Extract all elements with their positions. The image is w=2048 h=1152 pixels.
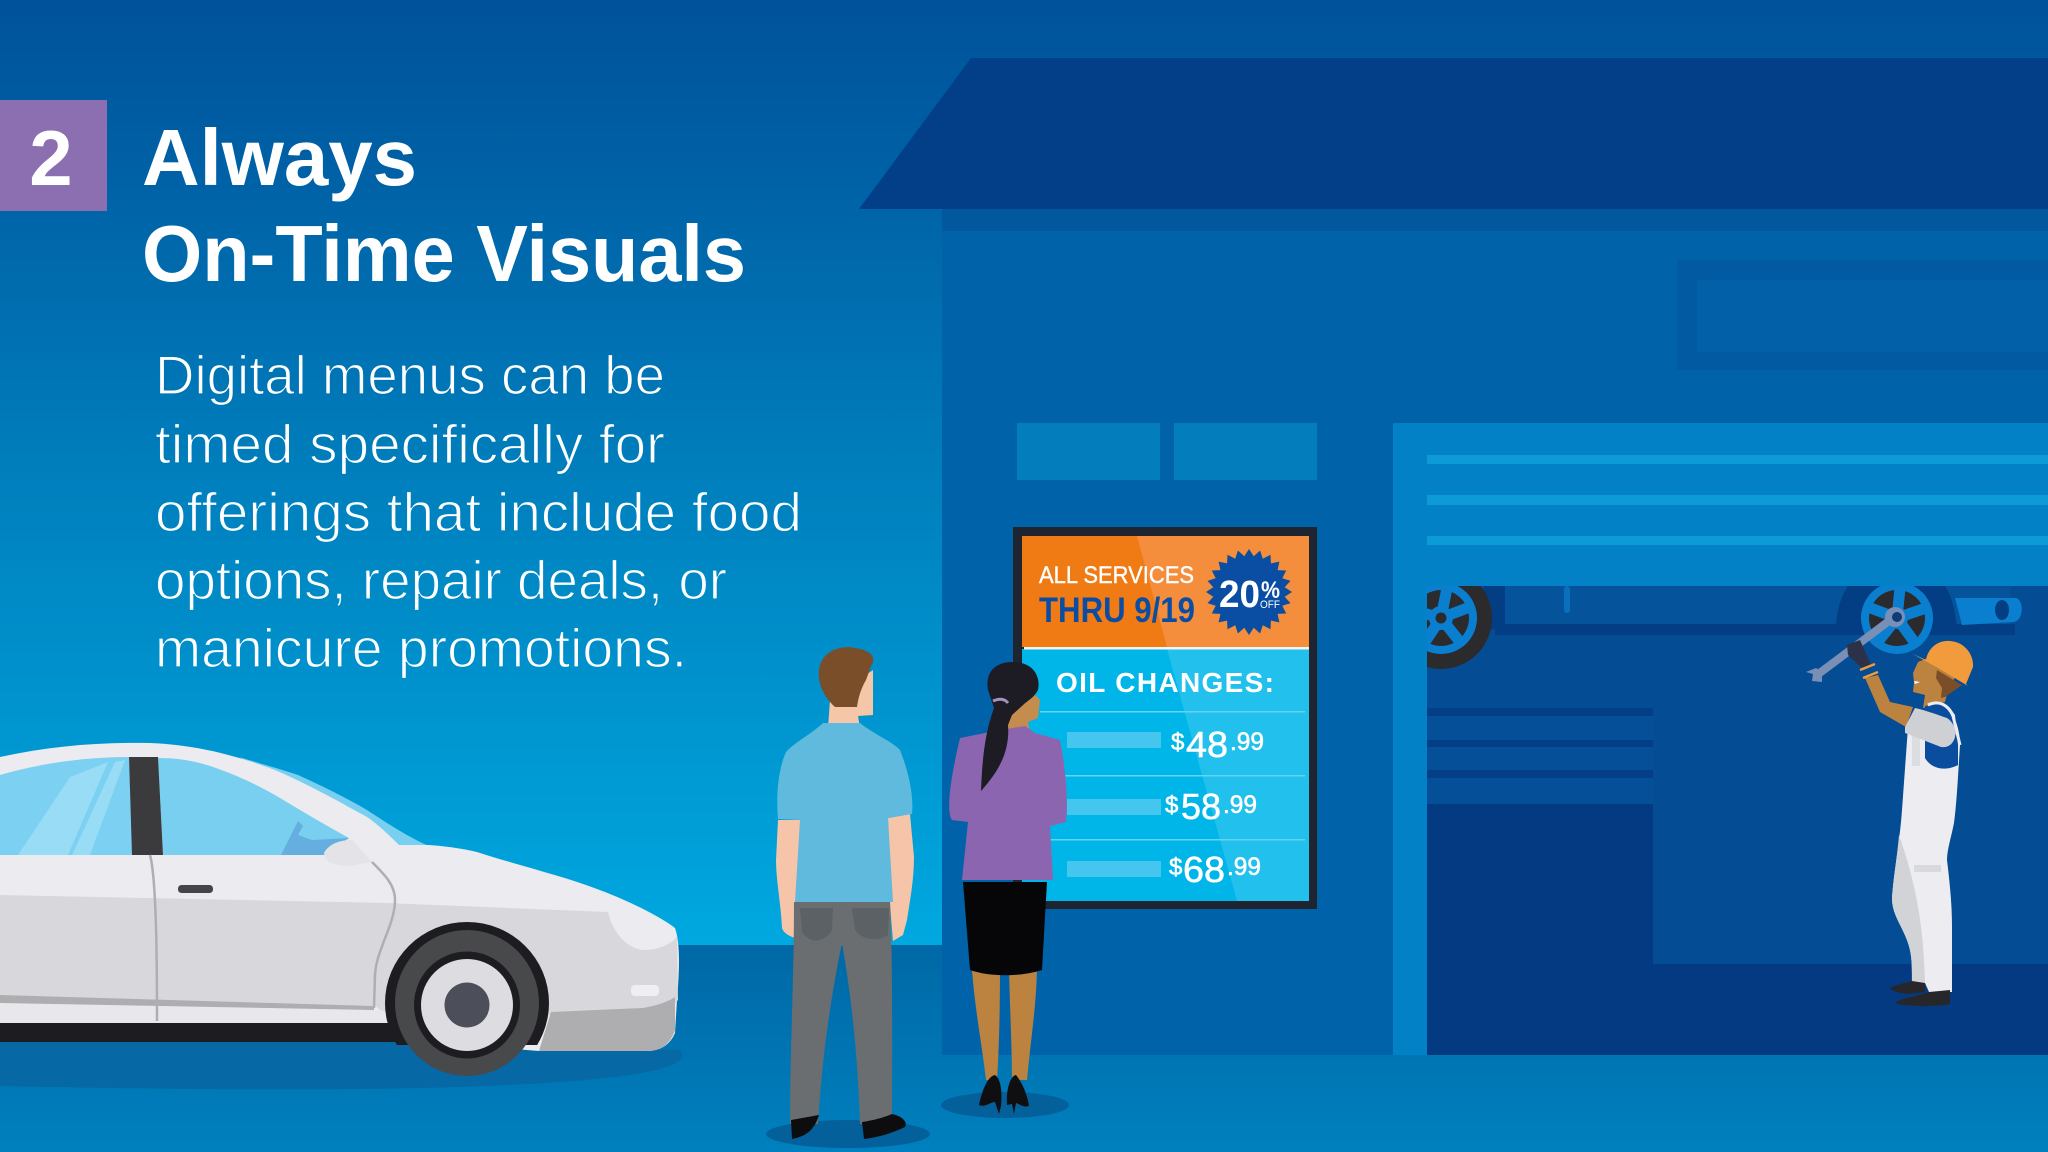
price 58.99: $ xyxy=(1165,792,1178,819)
garage xyxy=(1390,423,2048,1055)
front wheel xyxy=(385,922,549,1084)
sill xyxy=(0,1023,420,1042)
discount badge: OFF xyxy=(1260,599,1280,611)
car xyxy=(0,743,682,1089)
blue menu area xyxy=(1022,649,1309,901)
discount badge: % xyxy=(1261,577,1280,604)
front window xyxy=(158,758,349,855)
rocker panel xyxy=(381,1010,386,1016)
side mirror xyxy=(324,840,346,855)
mechanic xyxy=(1806,607,1973,1006)
price 48.99: $ xyxy=(1171,729,1184,756)
mechanic glove xyxy=(1847,640,1871,668)
building xyxy=(859,58,2048,1055)
small windows xyxy=(1017,423,1317,480)
orange header xyxy=(1022,536,1309,647)
woman xyxy=(941,662,1069,1118)
header divider xyxy=(1024,647,1309,650)
header text: ALL SERVICES xyxy=(1039,562,1194,589)
woman shadow xyxy=(941,1092,1069,1118)
man shadow xyxy=(766,1120,930,1148)
price 68.99: $ xyxy=(1169,854,1182,881)
man neck and ears xyxy=(828,670,873,728)
smile xyxy=(1914,681,1920,684)
man hair xyxy=(819,647,873,707)
wrench xyxy=(1806,607,1905,682)
title: Always xyxy=(142,113,417,202)
garage interior xyxy=(1427,586,2048,1055)
door seams xyxy=(150,855,395,1021)
price 58.99: .99 xyxy=(1223,791,1257,819)
discount badge xyxy=(1206,549,1292,635)
price 48.99: .99 xyxy=(1230,728,1264,756)
mechanic sleeve xyxy=(1905,708,1956,747)
lower body panel xyxy=(0,895,678,1023)
car shadow xyxy=(0,1042,682,1089)
price 48.99 xyxy=(1171,724,1264,765)
front bumper xyxy=(539,997,675,1051)
price 58.99 xyxy=(1165,786,1257,827)
hard hat xyxy=(1913,641,1973,686)
building wall xyxy=(942,209,2048,1055)
left wheel xyxy=(1427,586,1492,669)
roof xyxy=(859,58,2048,209)
price 48.99: 48 xyxy=(1186,724,1228,765)
woman skirt xyxy=(963,882,1047,975)
overall strap xyxy=(1928,703,1960,745)
mechanic arm xyxy=(1865,675,1913,727)
workbench cabinet xyxy=(1427,708,1653,964)
window reflections xyxy=(18,760,125,855)
menu dividers xyxy=(1040,711,1305,840)
sign frame xyxy=(1013,527,1317,909)
lifted car underside xyxy=(1427,586,2022,669)
exhaust xyxy=(1955,598,2022,625)
header text xyxy=(1039,562,1195,630)
overall pocket xyxy=(1912,736,1920,766)
title: On-Time Visuals xyxy=(142,209,746,298)
body text: offerings that include food xyxy=(155,481,802,543)
woman jacket xyxy=(949,726,1067,880)
man trousers xyxy=(790,902,892,1124)
rear window xyxy=(0,757,133,855)
seat silhouette xyxy=(281,821,349,855)
door pillar xyxy=(129,757,163,855)
shaded leg xyxy=(1892,835,1925,983)
mechanic boots xyxy=(1890,981,1950,1006)
eave shadow band xyxy=(942,209,2048,231)
wrist bands xyxy=(1860,664,1878,678)
price 58.99: 58 xyxy=(1181,786,1221,827)
overalls xyxy=(1892,705,1960,992)
hair tie xyxy=(993,699,1008,703)
woman face xyxy=(1005,685,1040,733)
windshield xyxy=(239,757,429,850)
discount badge: 20 xyxy=(1219,574,1260,616)
menu row placeholders xyxy=(1067,732,1161,877)
woman hair xyxy=(981,662,1039,791)
blue shirt xyxy=(1925,703,1958,769)
woman heels xyxy=(979,1075,1029,1114)
body crease xyxy=(0,995,374,1010)
number badge xyxy=(0,100,107,211)
car body xyxy=(0,743,679,1051)
door handle xyxy=(178,885,213,893)
price 68.99: 68 xyxy=(1183,849,1225,890)
woman legs xyxy=(972,970,1037,1080)
body text xyxy=(155,344,802,679)
mechanic head xyxy=(1913,655,1958,708)
bumper light xyxy=(631,985,659,996)
man xyxy=(766,647,930,1148)
interior floor xyxy=(1427,964,2048,1055)
man arms xyxy=(776,814,914,941)
door slats xyxy=(1427,455,2048,545)
man shirt xyxy=(777,723,912,902)
price 68.99: .99 xyxy=(1227,853,1261,881)
mechanic hair xyxy=(1936,670,1962,698)
body text: manicure promotions. xyxy=(155,617,687,679)
price 68.99 xyxy=(1169,849,1261,890)
pockets xyxy=(800,908,889,940)
man shoes xyxy=(791,1114,906,1139)
body text: timed specifically for xyxy=(155,413,665,475)
title xyxy=(142,113,746,298)
garage door frame xyxy=(1393,423,2048,1055)
number badge: 2 xyxy=(29,114,73,202)
body text: Digital menus can be xyxy=(155,344,665,406)
ground xyxy=(0,945,2048,1152)
right wheel xyxy=(1861,582,1933,654)
menu heading: OIL CHANGES: xyxy=(1056,667,1274,698)
digital sign xyxy=(1013,527,1317,909)
header text: THRU 9/19 xyxy=(1039,591,1195,630)
upper wall sign panel xyxy=(1677,260,2048,370)
body text: options, repair deals, or xyxy=(155,549,727,611)
